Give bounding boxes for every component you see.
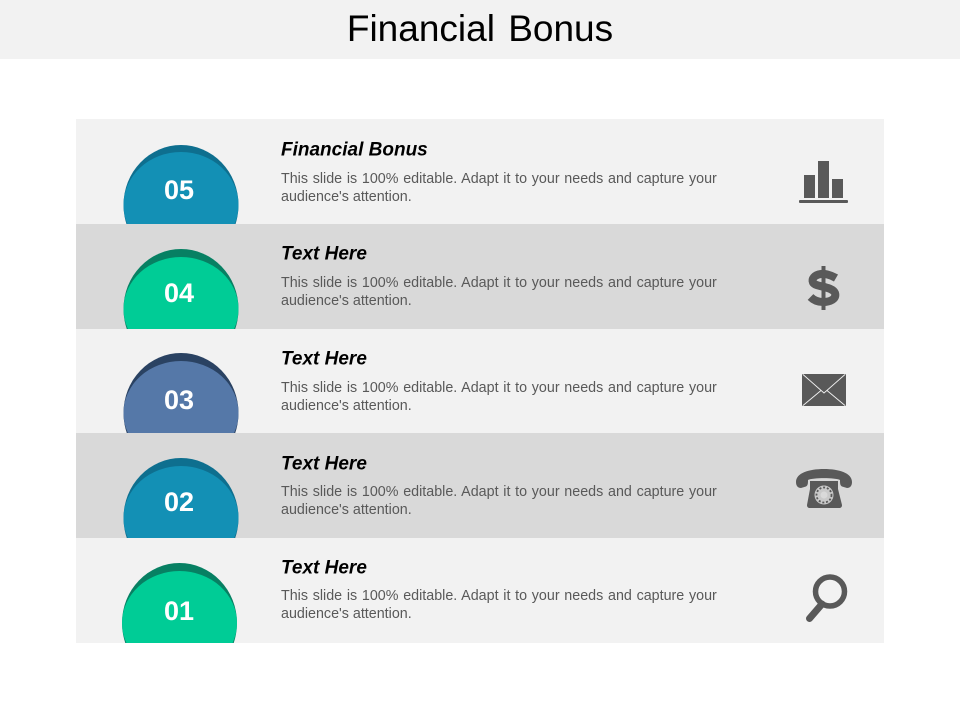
heading: Text Here [281,244,367,264]
icon: envelope [802,374,846,406]
description: audience's attention. [281,398,412,414]
description: audience's attention. [281,293,412,309]
badge 03: 03 [164,385,194,415]
title banner [0,0,960,59]
icon: bar chart [799,161,848,203]
badge 01: 01 [164,596,194,626]
row 05: Financial Bonus [76,119,884,224]
badge 04: 04 [164,278,194,308]
row 03: Text Here [76,329,884,433]
row 04: Text Here [76,224,884,329]
badge 02: 02 [164,487,194,517]
badge 01 [122,563,237,643]
heading: Text Here [281,454,367,474]
badge 05: 05 [164,175,194,205]
badge 05 [124,145,238,224]
description: This slide is 100% editable. Adapt it to your needs and capture your [281,171,717,187]
row 02: Text Here [76,433,884,538]
badge 02 [124,458,238,538]
heading: Financial Bonus [281,140,428,160]
heading: Text Here [281,348,367,370]
title: Financial Bonus [347,8,613,49]
description: This slide is 100% editable. Adapt it to your needs and capture your [281,275,717,291]
description: This slide is 100% editable. Adapt it to your needs and capture your [281,484,717,500]
description: This slide is 100% editable. Adapt it to your needs and capture your [281,380,717,396]
description: audience's attention. [281,502,412,518]
icon: telephone [796,469,852,508]
description: audience's attention. [281,189,412,205]
description: audience's attention. [281,606,412,622]
icon: dollar sign [810,266,836,310]
description: This slide is 100% editable. Adapt it to your needs and capture your [281,588,717,604]
badge 04 [124,249,238,329]
icon: magnifying glass [810,577,844,618]
heading: Text Here [281,558,367,578]
badge 03 [124,353,238,433]
row 01: Text Here [76,538,884,643]
